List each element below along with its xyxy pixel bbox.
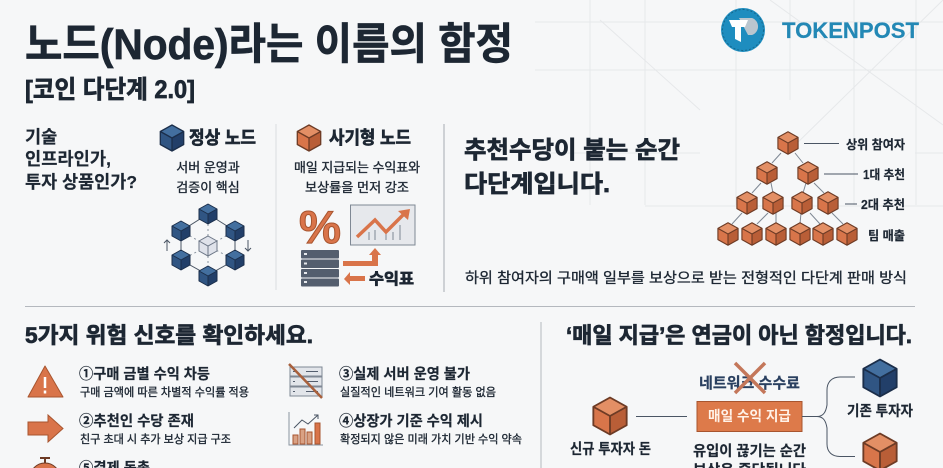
sign 3: 실질적인 네트워크 기여 활동 없음 — [340, 385, 496, 399]
icon: bar chart — [289, 412, 323, 445]
label: new investor money: 신규 투자자 돈 — [570, 441, 651, 458]
sign 4: ④상장가 기준 수익 제시 — [339, 413, 483, 430]
icon: new investor cube — [593, 398, 627, 434]
heading: referral bonus — [464, 137, 680, 198]
chart: rising returns — [350, 205, 415, 245]
label: existing investor: 기존 투자자 — [847, 403, 914, 420]
sign 1: ①구매 금별 수익 차등 — [79, 366, 210, 383]
description: scam node — [294, 160, 420, 195]
icon: warning triangle — [28, 366, 63, 397]
description: normal node — [176, 160, 240, 195]
arrow: to server — [344, 272, 365, 285]
icon: stopwatch — [30, 458, 60, 468]
text: inflow stops — [693, 443, 807, 468]
heading: normal node: 정상 노드 — [189, 128, 256, 148]
network diagram — [164, 204, 251, 286]
label: network fee crossed out: 네트워크 수수료 — [699, 375, 800, 392]
description: scam node: 매일 지급되는 수익표와 — [294, 160, 420, 175]
sign 1 — [79, 366, 249, 399]
sign 2: ②추천인 수당 존재 — [79, 413, 194, 430]
icon: crossed server — [289, 364, 322, 398]
icon: existing investor cube — [863, 360, 897, 396]
title: 노드(Node)라는 이름의 함정 — [25, 21, 513, 69]
sign 3: ③실제 서버 운영 불가 — [339, 366, 470, 383]
pyramid diagram — [718, 132, 905, 245]
pyramid labels: 1대 추천 — [863, 168, 905, 182]
icon: blue cube — [160, 125, 184, 151]
box: daily payout: 매일 수익 지급 — [708, 408, 791, 424]
logo: tokenpost — [721, 8, 920, 52]
sign 4: 확정되지 않은 미래 가치 기반 수익 약속 — [340, 432, 522, 446]
box: daily payout — [697, 402, 802, 432]
question text — [25, 127, 137, 192]
description: normal node: 검증이 핵심 — [176, 180, 240, 195]
description: normal node: 서버 운영과 — [176, 160, 240, 175]
description: mlm definition: 하위 참여자의 구매액 일부를 보상으로 받는 전형적인 다단계 판매 방식 — [465, 270, 907, 287]
sign 1: 구매 금액에 따른 차별적 수익률 적용 — [80, 386, 249, 399]
sign 4 — [339, 413, 522, 446]
bracket — [802, 377, 855, 456]
sign 2 — [79, 413, 231, 446]
sign 3 — [339, 366, 496, 399]
icon: arrow — [28, 415, 63, 442]
text: inflow stops: 유입이 끊기는 순간 — [693, 443, 806, 460]
label: network fee crossed out — [699, 363, 800, 393]
panel: scam node — [294, 125, 420, 288]
pyramid labels — [846, 137, 905, 243]
icon: orange investor cube — [863, 434, 897, 468]
heading: daily pay trap: ‘매일 지급’은 연금이 아닌 함정입니다. — [566, 323, 912, 348]
arrow: to chart — [343, 248, 381, 266]
pyramid labels: 2대 추천 — [861, 198, 905, 212]
icon: orange cube — [297, 125, 321, 151]
label: returns table: 수익표 — [369, 270, 414, 288]
question text: 투자 상품인가? — [25, 172, 137, 192]
sign 2: 친구 초대 시 추가 보상 지급 구조 — [80, 433, 231, 446]
icon: percent: % — [299, 201, 341, 253]
pyramid labels: 팀 매출 — [868, 228, 905, 243]
description: scam node: 보상률을 먼저 강조 — [305, 180, 409, 195]
panel: normal node — [160, 125, 256, 286]
logo: tokenpost: TOKENPOST — [782, 18, 920, 43]
heading: five warning signs: 5가지 위험 신호를 확인하세요. — [25, 323, 313, 348]
subtitle: [코인 다단계 2.0] — [25, 76, 195, 104]
pyramid labels: 상위 참여자 — [846, 137, 905, 152]
heading: referral bonus: 다단계입니다. — [464, 171, 610, 198]
heading: referral bonus: 추천수당이 붙는 순간 — [464, 137, 680, 164]
question text: 인프라인가, — [25, 149, 111, 169]
icon: server stack — [301, 250, 339, 286]
flow diagram: daily payout — [570, 360, 914, 468]
question text: 기술 — [25, 127, 57, 147]
heading: scam node: 사기형 노드 — [329, 128, 411, 148]
